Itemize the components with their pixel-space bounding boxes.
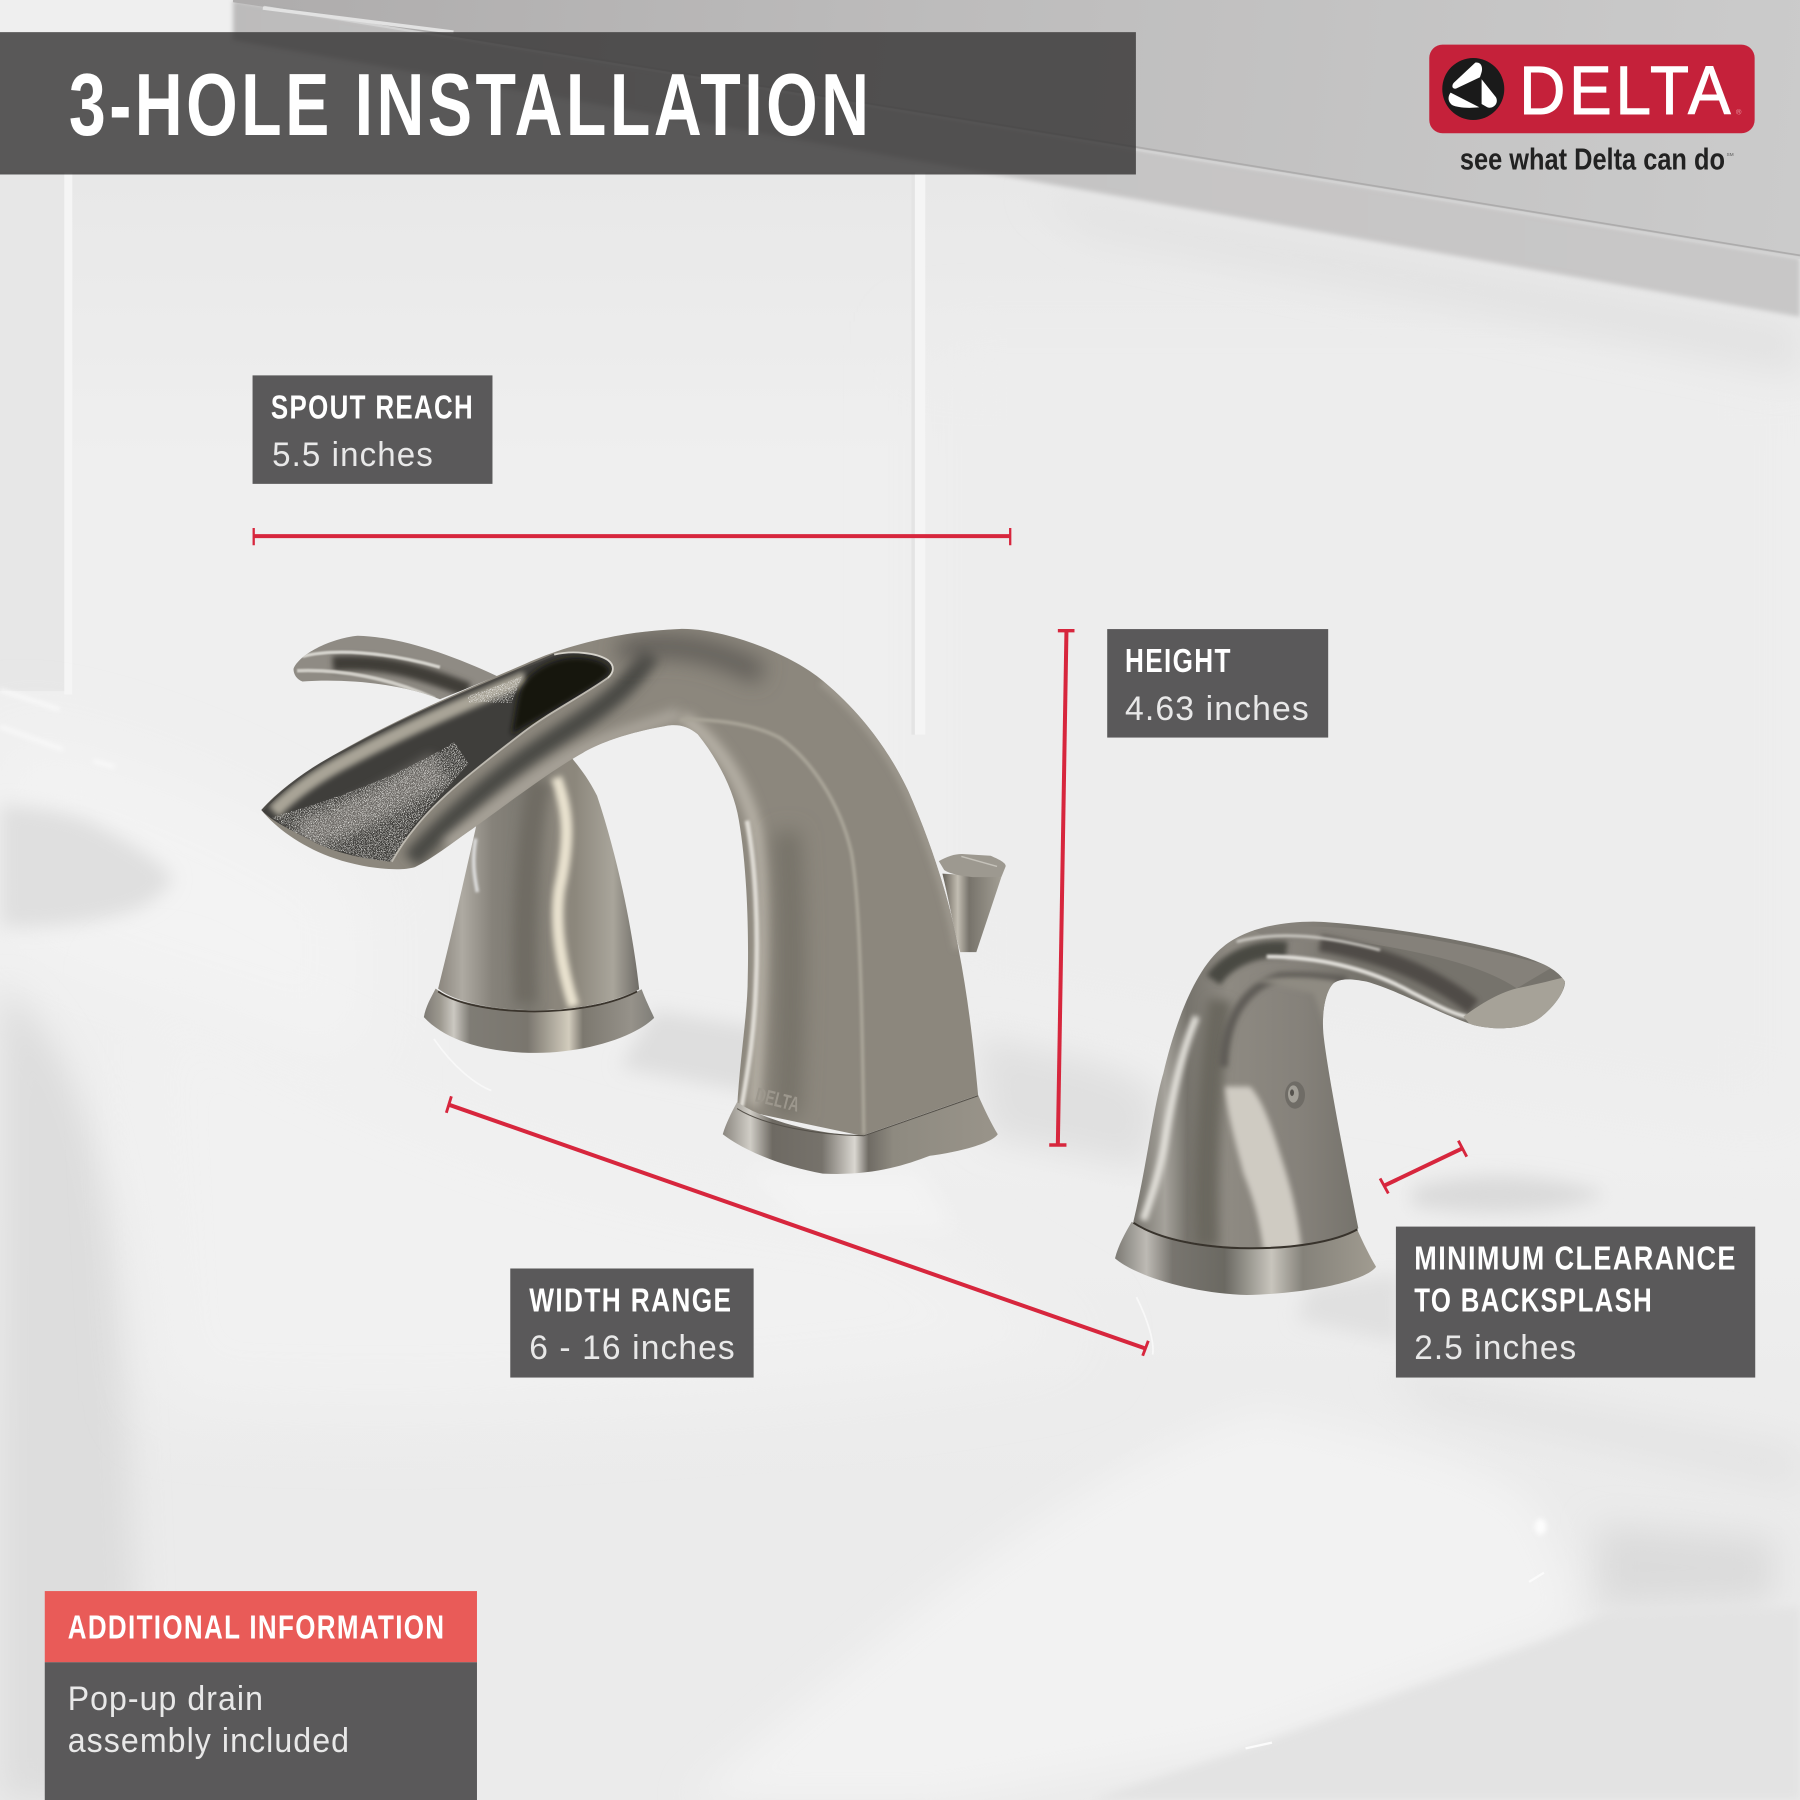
registered mark: ® [1736, 108, 1742, 117]
right handle base ring [1115, 1222, 1376, 1295]
mirror and shelf edge [233, 0, 1800, 379]
minimum clearance callout [1396, 1227, 1755, 1378]
counter white edge and sink shading [0, 690, 1800, 1800]
width range callout [510, 1268, 754, 1378]
label value: 2.5 inches [1414, 1329, 1577, 1367]
panel body [45, 1662, 477, 1800]
tagline: see what Delta can do [1460, 142, 1725, 176]
label box [510, 1268, 754, 1378]
right handle body and lever [1133, 922, 1567, 1250]
label heading: SPOUT REACH [271, 389, 474, 426]
column base ring [723, 1095, 998, 1174]
logo badge [1429, 45, 1755, 133]
title bar [0, 32, 1136, 174]
DELTA mark on column: DELTA [753, 1084, 802, 1117]
label heading: WIDTH RANGE [529, 1283, 732, 1320]
left handle body [438, 758, 639, 1010]
logo wordmark: DELTA [1519, 53, 1734, 129]
left handle, spout and pop-up knob [261, 629, 1006, 1174]
pop-up knob [939, 854, 1006, 952]
title text: 3-HOLE INSTALLATION [69, 56, 872, 154]
label box [1396, 1227, 1755, 1378]
spout reach dimension line [254, 528, 1010, 545]
set screw [1285, 1081, 1305, 1109]
panel header text: ADDITIONAL INFORMATION [68, 1610, 445, 1647]
minimum clearance dimension line [1380, 1141, 1467, 1193]
left handle base ring [424, 989, 654, 1053]
lever top shading [1253, 926, 1553, 988]
basin highlights [1246, 1519, 1546, 1748]
service mark: SM [1727, 152, 1734, 157]
label box [1107, 629, 1328, 738]
lever tip face [1463, 977, 1567, 1032]
label heading: HEIGHT [1125, 643, 1232, 680]
additional information panel [45, 1591, 477, 1800]
label heading line 1: MINIMUM CLEARANCE [1414, 1241, 1737, 1278]
panel body text line 2: assembly included [68, 1722, 350, 1760]
faucet contact shadows and reflections [434, 1010, 1607, 1355]
label value: 6 - 16 inches [529, 1329, 736, 1367]
drain slot [511, 657, 611, 735]
spout trough [262, 652, 613, 865]
Delta logo [1429, 45, 1755, 176]
label value: 4.63 inches [1125, 690, 1310, 728]
spout shading [411, 646, 958, 1134]
basin shading [1598, 1524, 1774, 1607]
right handle [1115, 922, 1567, 1295]
spout reach callout [253, 375, 492, 484]
cheek highlight [1225, 1087, 1302, 1250]
height callout [1107, 629, 1328, 738]
width range dimension line [446, 1096, 1148, 1356]
label heading line 2: TO BACKSPLASH [1414, 1283, 1653, 1320]
label box [253, 375, 492, 484]
collar line [1133, 1223, 1357, 1248]
height dimension line [1049, 631, 1074, 1145]
spout body [261, 629, 978, 1136]
panel body text line 1: Pop-up drain [68, 1680, 264, 1718]
left lever [293, 636, 497, 699]
logo mark [1442, 58, 1504, 120]
label value: 5.5 inches [272, 436, 434, 474]
panel header [45, 1591, 477, 1662]
